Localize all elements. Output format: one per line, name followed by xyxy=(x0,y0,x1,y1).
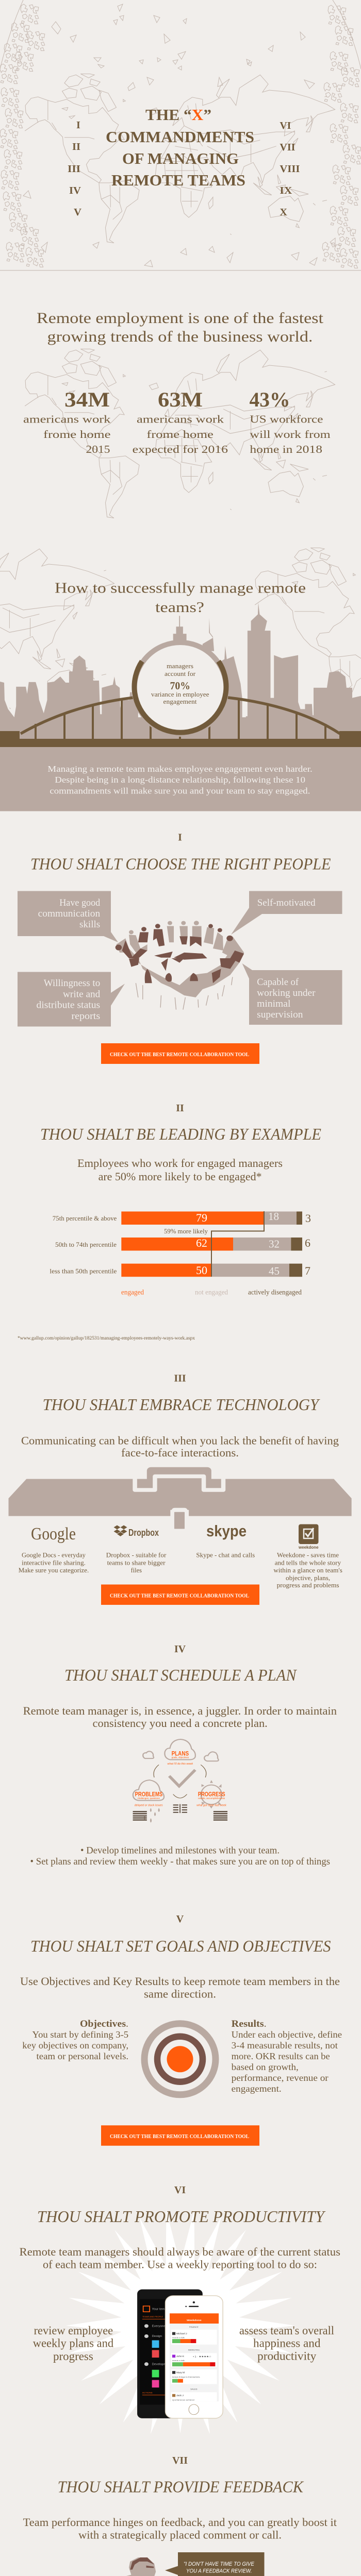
stat: 43%: US workforce xyxy=(250,413,323,426)
icon: target xyxy=(144,2024,216,2095)
diagram: plans, progress, problems: goals, objectives xyxy=(172,1756,189,1758)
header panel: world map title xyxy=(0,0,361,268)
numerals left: IV xyxy=(69,185,81,196)
stat: 63M xyxy=(133,388,228,455)
callout: communication: communication xyxy=(38,908,101,919)
subheading: same direction. xyxy=(144,1987,216,2000)
caption: Weekdone: within a glance on team's xyxy=(273,1566,342,1574)
text: assess happiness: happiness and xyxy=(253,2337,321,2349)
callout: communication: Have good xyxy=(59,897,101,908)
android phone: Design xyxy=(152,2335,162,2338)
caption: Google Docs: interactive file sharing. xyxy=(22,1559,86,1566)
callout: self-motivated: Self-motivated xyxy=(257,897,316,908)
caption: Weekdone: objective, plans, xyxy=(286,1574,330,1582)
text: objectives: You start by defining 3-5 xyxy=(32,2029,128,2040)
button xyxy=(101,1585,259,1605)
caption: Google Docs: Make sure you categorize. xyxy=(19,1566,89,1574)
caption: Dropbox xyxy=(106,1551,167,1574)
numerals left: II xyxy=(72,141,80,152)
logo: Weekdone xyxy=(298,1524,319,1550)
legend: actively disengaged xyxy=(248,1288,302,1296)
numeral V: V xyxy=(176,1913,184,1925)
bar chart: 59% more likely xyxy=(164,1227,208,1235)
caption: Dropbox: teams to share bigger xyxy=(107,1559,166,1566)
iPhone: needs a talk xyxy=(172,2336,185,2338)
panel: intro band xyxy=(0,747,361,811)
heading: THOU SHALT CHOOSE THE RIGHT PEOPLE xyxy=(30,855,331,873)
text: assess happiness: assess team's overall xyxy=(239,2324,334,2337)
iPhone: Mary M xyxy=(176,2371,185,2374)
iPhone: FINANCE xyxy=(189,2326,199,2328)
section IV xyxy=(23,1643,340,1867)
subheading: consistency you need a concrete plan. xyxy=(93,1717,268,1730)
stat: 63M: expected for 2016 xyxy=(133,443,228,455)
circle callout: 70% xyxy=(134,642,226,734)
diagram: plans, progress, problems: delayed or stuck issues xyxy=(135,1804,163,1807)
text: objectives: team or personal levels. xyxy=(36,2051,128,2061)
footnote: *www.gallup.com/opinion/gallup/182531/managing-employees-remotely-ways-work.aspx xyxy=(18,1335,195,1341)
skyline xyxy=(0,603,361,741)
panel: intro band: Despite being in a long-distance relationship, following these 10 xyxy=(55,775,305,785)
callout: communication xyxy=(18,891,118,942)
circle callout: 70%: variance in employee xyxy=(151,691,209,698)
android phone: ACTIONS xyxy=(142,2392,153,2394)
bar chart: 18 xyxy=(268,1210,279,1223)
panel: intro band: Managing a remote team makes employee engagement even harder. xyxy=(47,764,313,774)
numerals left xyxy=(68,120,82,218)
caption: Dropbox: files xyxy=(131,1566,142,1574)
legend: engaged xyxy=(121,1288,144,1296)
title: THE “X” xyxy=(145,106,211,124)
heading: THOU SHALT SET GOALS AND OBJECTIVES xyxy=(30,1937,331,1955)
stat: 63M: frome home xyxy=(146,428,214,440)
illustration: man with hand on forehead xyxy=(95,2557,200,2576)
numerals right: VI xyxy=(280,120,291,131)
numerals right xyxy=(280,120,300,218)
callout: minimal supervision: minimal xyxy=(257,998,290,1009)
diagram: plans, progress, problems xyxy=(133,1739,227,1823)
bullet list: • Set plans and review them weekly - that makes sure you are on top of things xyxy=(30,1857,330,1867)
speech bubble quote: "I DON'T HAVE TIME TO GIVE xyxy=(184,2561,255,2567)
legend: not engaged xyxy=(195,1288,228,1296)
subheading: Use Objectives and Key Results to keep remote team members in the xyxy=(20,1975,340,1988)
android phone: TEAMS AND PEOPLE xyxy=(142,2315,163,2318)
heading: THOU SHALT PROVIDE FEEDBACK xyxy=(58,2477,304,2496)
android phone: Your tem xyxy=(152,2308,165,2311)
text: assess happiness: productivity xyxy=(257,2349,317,2363)
bridge with arches xyxy=(0,698,361,747)
numerals right: VIII xyxy=(280,163,300,175)
iPhone: MARKETING xyxy=(188,2349,200,2351)
world map outline xyxy=(0,0,361,268)
text: objectives: Objectives . xyxy=(80,2019,128,2029)
section VI xyxy=(20,2184,343,2434)
numerals left: III xyxy=(68,163,80,175)
circle callout: 70%: managers xyxy=(167,663,193,670)
logo: Weekdone: weekdone xyxy=(298,1545,319,1550)
diagram: plans, progress, problems: PROGRESS xyxy=(198,1791,225,1798)
bar chart: 3 xyxy=(305,1212,311,1225)
android phone: Developme xyxy=(152,2363,169,2366)
numerals right: IX xyxy=(280,185,292,196)
circle callout: 70%: 70% xyxy=(170,680,190,692)
button xyxy=(101,1043,259,1064)
stat: 43%: 43% xyxy=(250,388,290,411)
bullet list: • Develop timelines and milestones with your team. xyxy=(80,1845,280,1856)
iPhone: Weekdone xyxy=(187,2319,202,2321)
callout: minimal supervision: Capable of xyxy=(257,977,299,988)
diagram: plans, progress, problems: PLANS xyxy=(172,1750,189,1757)
circle callout: 70%: account for xyxy=(165,670,196,677)
subheading: Communicating can be difficult when you lack the benefit of having xyxy=(21,1434,339,1447)
logo: Skype: skype xyxy=(206,1522,247,1540)
bar chart: 50th to 74th percentile xyxy=(55,1241,117,1248)
section VII xyxy=(9,2455,351,2576)
caption: Weekdone: and tells the whole story xyxy=(275,1559,341,1566)
subheading: Employees who work for engaged managers xyxy=(77,1157,283,1170)
caption: Google Docs xyxy=(19,1551,89,1574)
bar chart: 32 xyxy=(269,1238,280,1250)
diagram: plans, progress, problems: results, accomplishments xyxy=(198,1797,225,1800)
text: review plans: review employee xyxy=(34,2324,113,2337)
bar chart: 6 xyxy=(305,1236,310,1249)
numerals right: X xyxy=(280,207,287,218)
callout: status reports: reports xyxy=(71,1011,100,1022)
button: CHECK OUT THE BEST REMOTE COLLABORATION TOOL xyxy=(110,1593,249,1599)
logo: Dropbox xyxy=(113,1525,159,1538)
subheading: of each team member. Use a weekly reporting tool to do so: xyxy=(43,2258,317,2271)
question heading: How to successfully manage remote xyxy=(55,580,306,597)
iPhone: spontaneous achiever xyxy=(172,2399,195,2401)
text: results: Under each objective, define xyxy=(232,2029,342,2040)
iPhone xyxy=(166,2296,223,2418)
android phone: Everyone xyxy=(152,2325,166,2328)
wrapped world map xyxy=(0,548,361,717)
phones: weekdone mobile app xyxy=(137,2290,223,2418)
heading: THOU SHALT SCHEDULE A PLAN xyxy=(64,1666,297,1684)
bar chart: 79 xyxy=(196,1211,207,1224)
button xyxy=(101,2125,259,2146)
subheading: Team performance hinges on feedback, and you can greatly boost it xyxy=(23,2516,337,2529)
intro statement: Remote employment is one of the fastest xyxy=(37,310,324,327)
bar chart: 7 xyxy=(305,1264,310,1277)
diagram: plans, progress, problems: PROBLEMS xyxy=(135,1791,162,1798)
numeral VII: VII xyxy=(172,2455,188,2466)
subheading: with a strategically placed comment or call. xyxy=(78,2529,282,2541)
iPhone: SALES xyxy=(190,2388,198,2390)
iPhone: Jack J xyxy=(176,2394,184,2397)
heading: THOU SHALT BE LEADING BY EXAMPLE xyxy=(40,1125,321,1143)
logo: Google: Google xyxy=(31,1524,76,1544)
bar chart: 50 xyxy=(196,1264,207,1277)
text: objectives: key objectives on company, xyxy=(22,2040,128,2050)
speech bubble quote xyxy=(165,2552,264,2576)
diagram: plans, progress, problems: challenges, questions xyxy=(138,1797,160,1800)
callout: communication: skills xyxy=(79,919,100,930)
callout: minimal supervision: working under xyxy=(257,988,316,998)
text: objectives xyxy=(22,2019,128,2061)
caption: Google Docs: Google Docs - everyday xyxy=(22,1551,86,1559)
subheading: Remote team manager is, in essence, a juggler. In order to maintain xyxy=(23,1704,337,1717)
icon: toolbox xyxy=(9,1467,352,1529)
section I xyxy=(18,832,342,1064)
callout: status reports: Willingness to xyxy=(44,978,100,989)
numerals right: VII xyxy=(280,142,296,153)
numerals left: V xyxy=(74,207,82,218)
circle callout: 70%: engagement xyxy=(163,698,197,705)
bar chart xyxy=(50,1210,311,1277)
text: results: engagement. xyxy=(232,2083,282,2094)
bar chart: 75th percentile & above xyxy=(53,1214,117,1222)
numeral I: I xyxy=(178,832,182,843)
stats panel xyxy=(23,349,335,518)
question heading: teams? xyxy=(155,599,204,616)
callout: status reports: distribute status xyxy=(36,999,100,1011)
caption: Weekdone: progress and problems xyxy=(277,1581,339,1589)
callout: minimal supervision xyxy=(242,963,342,1025)
title: OF MANAGING xyxy=(122,149,239,167)
caption: Weekdone xyxy=(273,1551,342,1589)
stat: 43% xyxy=(250,388,331,455)
stat: 34M: 2015 xyxy=(86,443,110,455)
subheading: Remote team managers should always be aware of the current status xyxy=(20,2245,340,2258)
intro statement: growing trends of the business world. xyxy=(47,328,313,345)
starburst background xyxy=(66,2210,295,2434)
heading: THOU SHALT PROMOTE PRODUCTIVITY xyxy=(37,2207,326,2226)
stat: 34M: 34M xyxy=(64,388,110,411)
numeral II: II xyxy=(176,1103,184,1114)
button: CHECK OUT THE BEST REMOTE COLLABORATION TOOL xyxy=(110,1052,249,1058)
subheading: face-to-face interactions. xyxy=(121,1446,239,1459)
diagram: plans, progress, problems: what I'll do this week xyxy=(168,1762,193,1766)
callout: minimal supervision: supervision xyxy=(257,1009,303,1020)
caption: Skype: Skype - chat and calls xyxy=(196,1551,255,1559)
stat: 34M xyxy=(23,388,111,455)
logo: Dropbox: Dropbox xyxy=(128,1528,159,1538)
callout: status reports xyxy=(18,972,125,1026)
text: review plans: weekly plans and xyxy=(33,2337,114,2349)
numerals left: I xyxy=(76,120,80,131)
stat: 43%: will work from xyxy=(250,428,331,440)
bar chart: 62 xyxy=(196,1236,207,1249)
text: results: more. OKR results can be xyxy=(232,2051,330,2061)
how-to map and skyline scene xyxy=(0,548,361,747)
stat: 34M: frome home xyxy=(43,428,110,440)
heading: THOU SHALT EMBRACE TECHNOLOGY xyxy=(43,1395,320,1414)
stats map background xyxy=(25,349,335,518)
callout: status reports: write and xyxy=(63,989,101,999)
numeral VI: VI xyxy=(174,2184,186,2196)
text: results: 3-4 measurable results, not xyxy=(232,2040,338,2050)
diagram: plans, progress, problems: what got done last week xyxy=(196,1804,226,1807)
legend xyxy=(121,1288,302,1296)
caption: Weekdone: Weekdone - saves time xyxy=(277,1551,339,1559)
callout: self-motivated xyxy=(231,891,342,935)
bar chart: less than 50th percentile xyxy=(50,1267,117,1275)
numeral IV: IV xyxy=(174,1643,186,1655)
stat: 63M: americans work xyxy=(137,413,224,426)
iPhone: Michael J xyxy=(176,2332,187,2335)
title: REMOTE TEAMS xyxy=(111,171,245,189)
button: CHECK OUT THE BEST REMOTE COLLABORATION TOOL xyxy=(110,2133,249,2140)
iPhone: needs a talk xyxy=(172,2359,185,2362)
section III xyxy=(9,1373,352,1605)
text: results xyxy=(232,2019,342,2094)
numeral III: III xyxy=(174,1373,186,1384)
iPhone: ▪ 1 · ★★★★☆ xyxy=(193,2355,212,2358)
iPhone: keeps things to themselves xyxy=(172,2376,200,2378)
bar chart: 45 xyxy=(269,1265,280,1277)
stat: 43%: home in 2018 xyxy=(250,443,322,455)
text: results: performance, revenue or xyxy=(232,2073,329,2083)
panel: intro band: commandments will make sure you and your team to stay engaged. xyxy=(50,786,310,795)
caption: Dropbox: Dropbox - suitable for xyxy=(106,1551,167,1559)
illustration: people in a circle xyxy=(116,921,244,1010)
section II xyxy=(18,1103,321,1341)
stat: 34M: americans work xyxy=(23,413,111,426)
text: results: Results . xyxy=(232,2019,267,2029)
subheading: are 50% more likely to be engaged* xyxy=(99,1170,262,1183)
android phone xyxy=(137,2290,203,2418)
stat: 63M: 63M xyxy=(158,388,203,411)
section V xyxy=(20,1913,342,2146)
iPhone: John K xyxy=(176,2355,185,2358)
text: review plans: progress xyxy=(53,2350,93,2363)
text: results: based on growth, xyxy=(232,2062,299,2072)
title: COMMANDMENTS xyxy=(106,128,254,146)
speech bubble quote: YOU A FEEDBACK REVIEW. xyxy=(186,2568,252,2574)
